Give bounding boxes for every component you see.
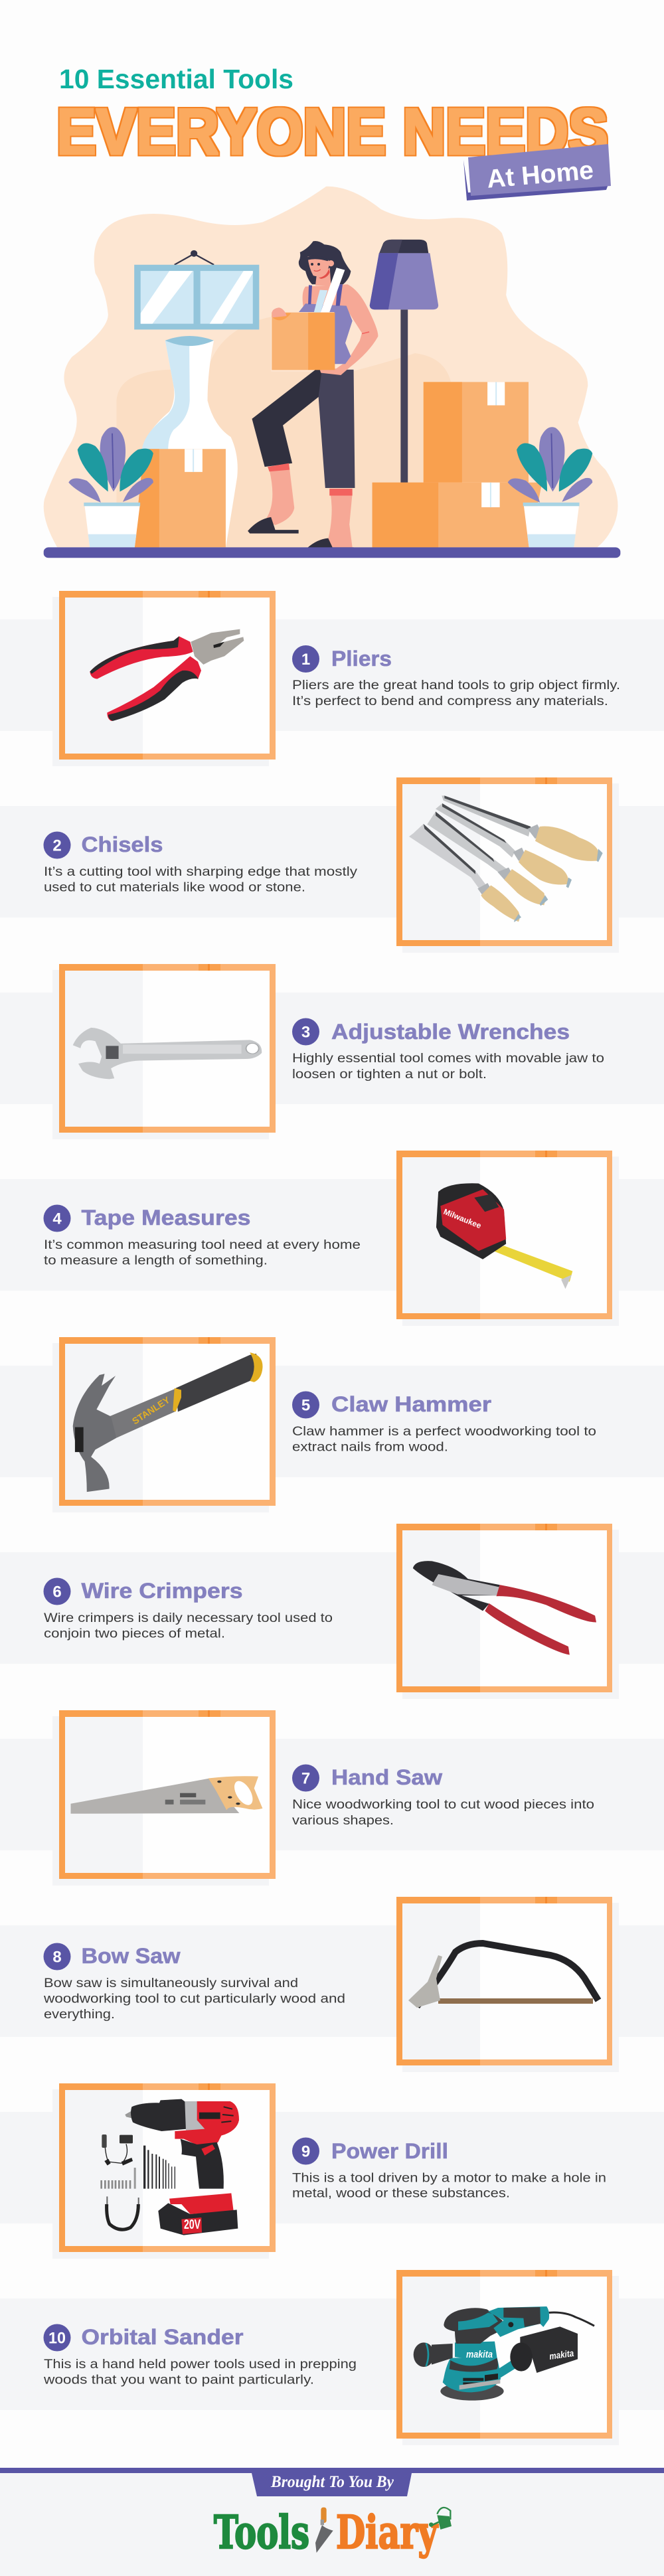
description: It’s perfect to bend and compress any materials. [292,694,608,708]
description [43,1976,345,2022]
heading: Orbital Sander [81,2325,243,2349]
blob background [44,187,618,547]
inner darker blob [116,317,451,547]
circle number [44,1577,70,1605]
circle number: 4 [52,1210,62,1228]
description: loosen or tighten a nut or bolt. [292,1068,487,1082]
heading: Tape Measures [81,1206,251,1230]
description: everything. [44,2008,115,2022]
panel: 4 Tape Measures [0,1151,664,1326]
description: It’s a cutting tool with sharping edge that mostly [44,865,358,879]
description [292,2171,606,2200]
circle number: 7 [301,1770,310,1787]
woman holding box [248,241,378,550]
tool: bow saw [408,1943,598,2008]
description: Pliers are the great hand tools to grip object firmly. [292,679,620,692]
hero illustration [44,187,620,558]
image frame [396,2270,619,2445]
image frame [396,1897,619,2072]
description: used to cut materials like wood or stone. [44,880,305,895]
circle number: 9 [301,2143,310,2160]
heading: Chisels [81,833,163,856]
image frame [52,2083,276,2259]
image frame [52,591,276,766]
title [56,64,611,201]
floor bar [44,547,620,558]
image frame [52,964,276,1139]
heading: Wire Crimpers [81,1579,243,1603]
logo: Tools Diary [214,2506,452,2559]
description [292,679,620,708]
description [292,1798,594,1828]
battery label: 20V [184,2217,201,2232]
tool: wire crimpers [413,1561,596,1654]
left cardboard box [134,449,226,547]
heading: Power Drill [331,2139,448,2163]
description: conjoin two pieces of metal. [44,1627,225,1641]
tool: wrench [73,1028,262,1079]
description: Nice woodworking tool to cut wood pieces into [292,1798,594,1812]
logo text tools: Tools [214,2506,309,2559]
dust bag brand: makita [548,2348,574,2362]
tool: orbital sander [414,2306,594,2401]
panel: 1 Pliers [0,591,664,766]
description: metal, wood or these substances. [292,2187,510,2200]
logo text diary: Diary [336,2506,439,2559]
icon: watering can [429,2508,452,2530]
sander brand: makita [466,2349,493,2360]
circle number [44,831,70,859]
circle number [44,1204,70,1232]
panel: 8 Bow Saw [0,1897,664,2072]
potted plant right [508,427,592,547]
heading: Bow Saw [81,1944,181,1968]
heading: Adjustable Wrenches [331,1020,570,1044]
description: to measure a length of something. [44,1253,268,1268]
description: Wire crimpers is daily necessary tool used to [44,1611,333,1625]
circle number [44,1943,70,1971]
circle number [292,1765,319,1791]
icon: trowel [315,2508,333,2553]
image frame [396,1151,619,1326]
panel: 7 Hand Saw [0,1710,664,1886]
tool: pliers [90,629,244,721]
description: This is a tool driven by a motor to make a hole in [292,2171,606,2186]
panel: 3 Adjustable Wrenches [0,964,664,1139]
description [44,1611,333,1641]
tool: power drill [102,2099,239,2235]
heading: Claw Hammer [331,1392,491,1416]
description: Bow saw is simultaneously survival and [44,1976,298,1990]
title line 1: 10 Essential Tools [59,64,293,94]
image frame [396,1524,619,1699]
title line 2: EVERYONE NEEDS [56,95,608,168]
footer [0,2468,664,2576]
description: various shapes. [292,1814,394,1828]
image frame [396,777,619,953]
heading: Pliers [331,647,392,671]
circle number: 5 [301,1397,310,1414]
circle number: 6 [52,1583,62,1601]
description: woodworking tool to cut particularly wood and [43,1992,345,2006]
circle number [292,2138,319,2164]
tool: chisels [409,795,603,922]
circle number: 2 [52,837,62,855]
hammer brand: STANLEY [130,1394,172,1427]
floor lamp [370,240,438,485]
description: Highly essential tool comes with movable jaw to [292,1052,604,1066]
description: It’s common measuring tool need at every home [44,1238,361,1252]
description [292,1425,596,1454]
panel: 10 Orbital Sander [0,2270,664,2445]
at home badge [463,144,611,201]
panel: 9 Power Drill [0,2083,664,2259]
panel: 5 Claw Hammer [0,1337,664,1512]
circle number: 10 [48,2329,66,2348]
stacked boxes [373,382,542,547]
panel: 2 Chisels [0,777,664,953]
at home badge: At Home [485,156,595,194]
circle number [292,645,319,673]
description: extract nails from wood. [292,1441,448,1454]
circle number: 3 [301,1024,310,1041]
circle number: 8 [52,1948,62,1967]
description: woods that you want to paint particularly. [43,2373,314,2387]
tool: tape measure [436,1183,572,1289]
image frame [52,1710,276,1886]
tool: hammer [73,1352,263,1492]
vase [142,336,238,547]
circle number [292,1392,319,1418]
potted plant left [68,427,153,547]
heading: Hand Saw [331,1765,442,1789]
circle number [292,1018,319,1045]
brought to you by ribbon: Brought To You By [270,2473,394,2491]
description: Claw hammer is a perfect woodworking tool to [292,1425,596,1439]
tape brand: Milwaukee [442,1207,483,1230]
description: This is a hand held power tools used in prepping [44,2358,357,2372]
description [44,1238,361,1268]
tool: hand saw [71,1776,262,1814]
panel: 6 Wire Crimpers [0,1524,664,1699]
brought to you by ribbon [252,2473,412,2496]
hanging window [134,250,259,329]
circle number: 1 [301,651,310,669]
image frame [52,1337,276,1512]
description [43,2358,357,2387]
circle number [44,2324,70,2352]
description [44,865,358,895]
description [292,1052,604,1082]
